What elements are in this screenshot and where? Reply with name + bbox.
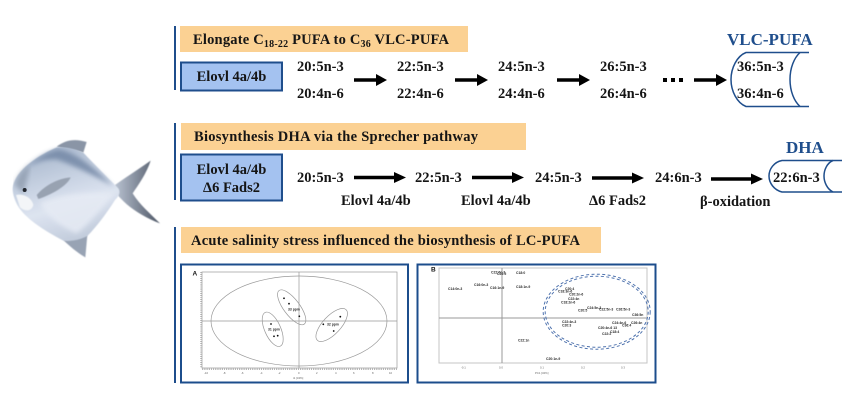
variable labels: C22:4n (568, 297, 579, 301)
variable labels: C22:4n-3 (562, 320, 576, 324)
variable labels: C22:6n-3 (491, 270, 505, 274)
heading banner: 36 (361, 39, 371, 50)
intermediate 22:5n-3: 22:5n-3 (415, 170, 462, 186)
axis tick labels (461, 366, 625, 375)
axis tick labels: -2 (278, 371, 281, 375)
variable labels: C18:3n-6 (558, 290, 572, 294)
fatty acids 20C (297, 59, 344, 102)
section: salinity stress (174, 227, 656, 383)
plot frame and axes (201, 272, 397, 369)
variable labels: C20:1n-9 (546, 357, 560, 361)
variable labels: C22:5n-3 (599, 308, 613, 312)
variable labels: C14:0n-3 (448, 287, 462, 291)
fatty acids 20C: 20:4n-6 (297, 86, 344, 102)
DHA product container (769, 160, 842, 192)
VLC-PUFA product container: 36:5n-3 (737, 59, 784, 75)
fatty acids 22C (397, 59, 444, 102)
cluster ellipses (258, 286, 353, 349)
variable labels: C22:1n (518, 338, 529, 342)
variable labels: C20:3 (562, 324, 571, 328)
variable labels: C18:0 (516, 271, 525, 275)
fatty acids 22C: 22:5n-3 (397, 59, 444, 75)
arrow (592, 172, 644, 184)
axis tick labels: -0.1 (461, 366, 466, 370)
axis tick labels (204, 371, 393, 380)
enzyme box: Δ6 Fads2 (203, 180, 260, 196)
axis tick labels: -10 (204, 371, 208, 375)
fatty acids 20C: 20:5n-3 (297, 59, 344, 75)
variable labels: C36:4 (622, 324, 631, 328)
heading banner: PUFA to C (288, 32, 360, 48)
variable labels: C24:4n-6 (612, 321, 626, 325)
heading banner: 18-22 (264, 39, 288, 50)
confidence ellipse (211, 276, 387, 366)
heading banner: Biosynthesis DHA via the Sprecher pathway (194, 129, 479, 145)
variable labels (448, 270, 643, 361)
enzyme box (181, 154, 282, 200)
heading banner (181, 123, 526, 150)
intermediate 24:5n-3: 24:5n-3 (535, 170, 582, 186)
panel letter A: A (192, 270, 198, 278)
enzyme box: Elovl 4a/4b (197, 69, 266, 85)
section: Sprecher pathway (174, 123, 842, 210)
heading banner: Elongate C (193, 32, 264, 48)
arrow (472, 172, 524, 183)
variable labels: C16:1n-9 (490, 286, 504, 290)
back shading (25, 149, 113, 186)
head highlight (16, 195, 33, 210)
ellipsis dots (663, 78, 683, 82)
enzyme label: Elovl 4a/4b (461, 193, 531, 209)
axis tick labels: -4 (260, 371, 263, 375)
axis tick labels: -8 (223, 371, 226, 375)
body (13, 147, 119, 241)
axis tick labels: 0.3 (621, 366, 625, 370)
intermediate 24:6n-3: 24:6n-3 (655, 170, 702, 186)
data points (270, 297, 341, 337)
belly highlight (40, 193, 115, 233)
axis tick labels: t1 [34%] (293, 376, 303, 380)
panel A: score plot (181, 264, 408, 382)
enzyme label: Δ6 Fads2 (589, 193, 646, 209)
fatty acids 26C: 26:4n-6 (600, 86, 647, 102)
variable labels: C18:4 (610, 330, 619, 334)
cluster labels: 33 ppm (288, 308, 300, 312)
fatty acids 24C: 24:4n-6 (498, 86, 545, 102)
variable labels: C22:2 (602, 332, 611, 336)
variable labels: C20:5 (578, 308, 587, 312)
fish illustration (13, 140, 160, 257)
axis tick labels: 8 (372, 371, 374, 375)
panel B: loading plot (418, 264, 656, 382)
fatty acids 24C: 24:5n-3 (498, 59, 545, 75)
variable labels: C26:5n-3 (616, 308, 630, 312)
head band shading (15, 165, 30, 193)
section bar (174, 26, 176, 90)
enzyme label: Elovl 4a/4b (341, 193, 411, 209)
arrow (354, 172, 406, 183)
fatty acids 26C (600, 59, 647, 102)
variable labels: C26:4n (631, 321, 642, 325)
dashed highlight ellipse (543, 274, 650, 349)
arrow (694, 74, 727, 86)
variable labels: C20:5 (497, 272, 506, 276)
heading banner: VLC-PUFA (371, 32, 450, 48)
VLC-PUFA title: VLC-PUFA (727, 30, 813, 49)
heading banner (180, 26, 468, 52)
arrow (711, 174, 763, 184)
axis tick labels: -6 (241, 371, 244, 375)
enzyme label: β-oxidation (700, 194, 770, 210)
axis tick labels: 0 (298, 371, 300, 375)
VLC-PUFA product container (731, 52, 809, 106)
variable labels: C18:2n-6 (561, 300, 575, 304)
arrow (557, 74, 590, 86)
arrow (354, 74, 387, 86)
section bar (174, 227, 176, 383)
heading banner (181, 227, 601, 253)
heading banner: Acute salinity stress influenced the biosynthesis of LC-PUFA (191, 233, 581, 249)
axis tick labels: 0.0 (499, 366, 503, 370)
variable labels: C36:5n (632, 313, 643, 317)
axis tick labels: PC1 [34%] (535, 371, 549, 375)
cluster labels (268, 308, 339, 332)
cluster labels: 32 ppm (327, 322, 339, 326)
fatty acids 24C (498, 59, 545, 102)
axis tick labels: 0.1 (540, 366, 544, 370)
pectoral fin (37, 177, 71, 199)
fatty acids 26C: 26:5n-3 (600, 59, 647, 75)
DHA product container: 22:6n-3 (773, 170, 820, 186)
dorsal fin (57, 140, 87, 153)
tail fin (115, 161, 160, 223)
plot frame and axes (439, 268, 647, 363)
enzyme box: Elovl 4a/4b (197, 162, 266, 178)
anal fin (63, 235, 87, 257)
axis tick labels: 0.2 (581, 366, 585, 370)
variable labels: C24:5n-3 (587, 306, 601, 310)
axis tick labels: 10 (389, 371, 393, 375)
axis tick labels: 6 (353, 371, 355, 375)
DHA title: DHA (786, 138, 824, 157)
section: elongate PUFA (174, 26, 813, 106)
variable labels: C20:2n-6 (569, 292, 583, 296)
axis tick labels: 2 (316, 371, 318, 375)
variable labels: C16:0n-3 (474, 283, 488, 287)
enzyme box (181, 62, 282, 90)
eye (23, 188, 27, 192)
section bar (174, 123, 176, 200)
variable labels: C18:1n-9 (516, 285, 530, 289)
variable labels: C20:4n-6 13 (598, 326, 617, 330)
fatty acids 22C: 22:4n-6 (397, 86, 444, 102)
substrate 20:5n-3: 20:5n-3 (297, 170, 344, 186)
panel letter B: B (431, 266, 436, 274)
arrow (455, 74, 488, 86)
VLC-PUFA product container: 36:4n-6 (737, 86, 784, 102)
variable labels: C20:4 (565, 287, 574, 291)
axis tick labels: 4 (335, 371, 337, 375)
cluster labels: 31 ppm (268, 328, 280, 332)
